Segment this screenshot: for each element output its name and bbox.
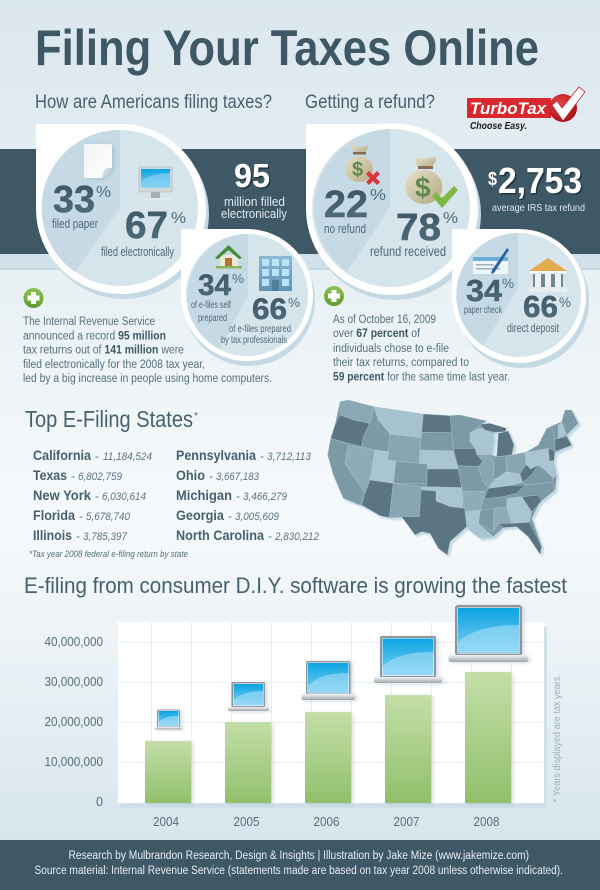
stat: 67% filed electronically: filed electronically — [101, 245, 175, 259]
x axis labels: 2007 — [394, 814, 420, 829]
heading: top e-filing states: * — [194, 411, 198, 422]
stat: 67% filed electronically — [101, 205, 186, 259]
text block: IRS record: tax returns out of 141 million were — [23, 344, 184, 356]
text block: IRS record: led by a big increase in people using home computers. — [23, 373, 272, 385]
stat: 34% self prepared: of e-files self — [191, 300, 231, 311]
list: top states column 1: Texas — [33, 467, 67, 483]
stat: 95 million: 95 — [234, 157, 270, 194]
stat: 78% refund received: 78 — [396, 207, 441, 249]
list: top states column 1 — [33, 447, 152, 543]
stat: 95 million: electronically — [221, 207, 288, 221]
list: top states column 2: Georgia — [176, 507, 224, 523]
icon: laptop 2005 — [228, 682, 269, 711]
heading: how are Americans filing: How are Americans filing taxes? — [35, 92, 272, 113]
heading: top e-filing states: Top E-Filing States — [25, 406, 193, 432]
x axis labels: 2006 — [314, 814, 340, 829]
panel: self vs professional pie — [181, 229, 315, 366]
note: years displayed: * Years displayed are tax years. — [551, 674, 563, 802]
stat: 66% direct deposit — [507, 289, 571, 335]
stat: 78% refund received: % — [443, 210, 458, 227]
stat: 95 million: million filled — [224, 195, 285, 209]
TurboTax logo — [467, 87, 585, 132]
icon: house — [215, 245, 242, 268]
stat: 66% tax professionals: by tax professionals — [221, 335, 287, 346]
list: top states column 2: Ohio — [176, 467, 205, 483]
stat: 22% no refund: 22 — [324, 184, 368, 226]
text block: IRS record: filed electronically for the 2008 tax year, — [23, 359, 205, 371]
text block: October statistic: individuals chose to e-file — [333, 343, 449, 355]
text block: October statistic: over 67 percent of — [333, 328, 421, 340]
list: top states column 1: - — [71, 469, 75, 483]
stat: average refund: $ — [488, 169, 497, 189]
list: top states column 2: - — [268, 529, 272, 543]
icon: laptop 2004 — [155, 710, 182, 730]
icon: plus left — [24, 288, 44, 308]
x axis labels: 2008 — [474, 814, 500, 829]
stat: 34% paper check: 34 — [466, 273, 503, 308]
y axis labels: 10,000,000 — [44, 754, 103, 769]
list: top states column 1: - — [76, 529, 80, 543]
list: top states column 2: 3,667,183 — [216, 471, 260, 483]
TurboTax logo: TurboTax — [470, 99, 548, 118]
list: top states column 2: - — [209, 469, 213, 483]
stat: 33% filed paper — [52, 179, 111, 231]
text block: IRS record: The Internal Revenue Service — [23, 316, 155, 328]
icon: money bag with cross: $ — [352, 159, 363, 181]
list: top states column 1: Florida — [33, 507, 75, 523]
stat: average refund — [488, 160, 585, 214]
x axis labels — [153, 814, 500, 829]
list: top states column 2: 3,712,113 — [267, 451, 312, 463]
list: top states column 1: 11,184,524 — [103, 451, 152, 463]
list: top states column 2 — [176, 447, 319, 543]
footer: Research by Mulbrandon Research, Design & Insights | Illustration by Jake Mize (www.jakemize.com) — [68, 850, 529, 862]
footer — [0, 840, 600, 890]
y axis labels: 40,000,000 — [44, 634, 103, 649]
list: top states column 1: - — [79, 509, 83, 523]
y axis labels — [44, 634, 103, 809]
stat: 67% filed electronically: 67 — [125, 205, 168, 247]
stat: 22% no refund: % — [370, 187, 386, 204]
stat: 66% direct deposit: 66 — [523, 289, 558, 324]
list: top states column 2: Pennsylvania — [176, 447, 256, 463]
icon: money bag with cross — [345, 145, 380, 185]
dark band — [0, 149, 600, 270]
text block: October statistic: 59 percent for the same time last year. — [333, 372, 510, 384]
stat: 34% self prepared — [191, 269, 244, 324]
heading: chart title: E-filing from consumer D.I.Y. software is growing the fastest — [24, 573, 567, 598]
list: top states column 1: - — [95, 449, 99, 463]
list: top states column 1: 5,678,740 — [86, 511, 131, 523]
text block: October statistic: their tax returns, compared to — [333, 357, 469, 369]
bars — [145, 672, 511, 803]
US map — [328, 400, 578, 555]
icon: laptop 2007 — [374, 636, 442, 683]
x axis labels: 2004 — [153, 814, 179, 829]
stat: 78% refund received — [370, 207, 458, 259]
list: top states column 1: Illinois — [33, 527, 72, 543]
x axis labels: 2005 — [234, 814, 260, 829]
stat: 67% filed electronically: % — [171, 210, 186, 227]
text block: IRS record — [23, 316, 272, 385]
list: top states column 2: Michigan — [176, 487, 232, 503]
stat: 34% paper check: % — [502, 275, 514, 291]
icon: money bag with check: $ — [415, 172, 431, 203]
list: top states column 1: 6,802,759 — [78, 471, 122, 483]
list: top states column 2: - — [228, 509, 232, 523]
stat: 34% paper check — [464, 273, 514, 316]
icon: laptop 2008 — [448, 605, 528, 662]
stat: 22% no refund — [324, 184, 386, 236]
panel: check vs deposit pie — [452, 229, 589, 368]
stat: 34% self prepared: prepared — [198, 313, 227, 324]
stat: 22% no refund: no refund — [324, 222, 366, 236]
stat: 66% tax professionals — [221, 293, 300, 346]
text block: October statistic: As of October 16, 2009 — [333, 314, 436, 326]
icon: monitor — [139, 167, 172, 200]
icon: paper sheet — [84, 144, 112, 178]
heading: getting a refund: Getting a refund? — [305, 92, 435, 113]
stat: 66% tax professionals: of e-files prepared — [229, 324, 291, 335]
icon: paper check and pen — [473, 248, 509, 274]
stat: 66% direct deposit: direct deposit — [507, 321, 559, 335]
list: top states column 2: 2,830,212 — [274, 531, 319, 543]
stat: average refund: average IRS tax refund — [492, 202, 585, 214]
footnote: tax year: *Tax year 2008 federal e-filing return by state — [29, 549, 188, 559]
list: top states column 2: 3,005,609 — [235, 511, 279, 523]
bar chart: e-filing growth — [44, 605, 547, 829]
icon: office building — [259, 256, 292, 291]
list: top states column 2: 3,466,279 — [243, 491, 287, 503]
stat: 66% tax professionals: % — [288, 295, 300, 310]
stat: 66% direct deposit: % — [559, 294, 571, 310]
text block: October statistic — [333, 314, 510, 384]
panel: paper vs electronic pie — [36, 124, 209, 299]
icon: plus right — [324, 286, 344, 306]
list: top states column 2: North Carolina — [176, 527, 264, 543]
title: Filing Your Taxes Online — [35, 20, 539, 76]
stat: 34% paper check: paper check — [464, 304, 502, 316]
list: top states column 1: New York — [33, 487, 91, 503]
icon: money bag with check — [406, 157, 458, 208]
panel: refund pie — [306, 123, 481, 300]
list: top states column 1: - — [95, 489, 99, 503]
icon: bank — [529, 258, 567, 292]
stat: 78% refund received: refund received — [370, 243, 446, 259]
list: top states column 2: - — [260, 449, 264, 463]
stat: 34% self prepared: % — [232, 271, 244, 286]
list: top states column 1: California — [33, 447, 91, 463]
stat: average refund: 2,753 — [498, 160, 582, 201]
text block: IRS record: announced a record 95 million — [23, 330, 166, 342]
icon: laptop 2006 — [302, 661, 355, 700]
stat: 33% filed paper: filed paper — [52, 217, 98, 231]
stat: 66% tax professionals: 66 — [252, 293, 287, 326]
stat: 33% filed paper: % — [96, 184, 111, 201]
list: top states column 2: - — [236, 489, 240, 503]
y axis labels: 30,000,000 — [44, 674, 103, 689]
stat: 33% filed paper: 33 — [53, 179, 95, 221]
stat: 34% self prepared: 34 — [198, 269, 231, 302]
stat: 95 million — [221, 157, 288, 221]
y axis labels: 0 — [96, 794, 103, 809]
y axis labels: 20,000,000 — [44, 714, 103, 729]
list: top states column 1: 3,785,397 — [83, 531, 128, 543]
list: top states column 1: 6,030,614 — [102, 491, 146, 503]
TurboTax logo: Choose Easy. — [470, 121, 527, 132]
